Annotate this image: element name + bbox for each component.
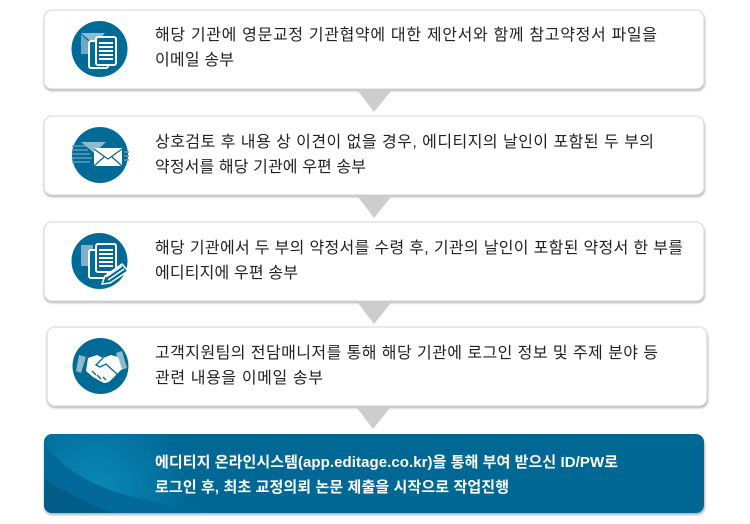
arrow: step 3 to 4: [358, 303, 391, 324]
panel: step 4: [47, 327, 708, 408]
arrow: step 1 to 2: [358, 91, 391, 112]
arrow: step 4 to 5: [357, 408, 390, 429]
panel: step 2: [44, 116, 705, 197]
text: step 2: 약정서를 해당 기관에 우편 송부: [155, 158, 366, 176]
arrow: step 2 to 3: [358, 197, 391, 218]
text: step 4: 관련 내용을 이메일 송부: [155, 369, 323, 387]
text: step 3: 에디티지에 우편 송부: [155, 264, 298, 282]
text: step 1: [155, 26, 657, 69]
text: step 4: [155, 344, 658, 387]
text: step 3: [155, 239, 683, 282]
icon: handshake: [72, 338, 128, 394]
text: step 5: 에디티지 온라인시스템(app.editage.co.kr)을 통해 부여 받으신 ID/PW로: [155, 454, 618, 471]
text: step 2: 상호검토 후 내용 상 이견이 없을 경우, 에디티지의 날인이 포함된 두 부의: [155, 133, 654, 151]
text: step 3: 해당 기관에서 두 부의 약정서를 수령 후, 기관의 날인이 포함된 약정서 한 부를: [155, 239, 683, 257]
icon: documents and pencil: [72, 233, 128, 289]
text: step 1: 이메일 송부: [155, 51, 234, 69]
icon: documents and envelope: [72, 21, 128, 77]
panel: step 1: [44, 10, 705, 91]
icon: envelopes: [72, 127, 129, 183]
text: step 5: [155, 454, 618, 496]
panel: step 3: [44, 222, 705, 303]
text: step 2: [155, 133, 654, 176]
text: step 5: 로그인 후, 최초 교정의뢰 논문 제출을 시작으로 작업진행: [155, 479, 509, 496]
text: step 4: 고객지원팀의 전담매니저를 통해 해당 기관에 로그인 정보 및 주제 분야 등: [155, 344, 658, 362]
panel: step 5: [44, 434, 705, 515]
text: step 1: 해당 기관에 영문교정 기관협약에 대한 제안서와 함께 참고약정서 파일을: [155, 26, 657, 44]
